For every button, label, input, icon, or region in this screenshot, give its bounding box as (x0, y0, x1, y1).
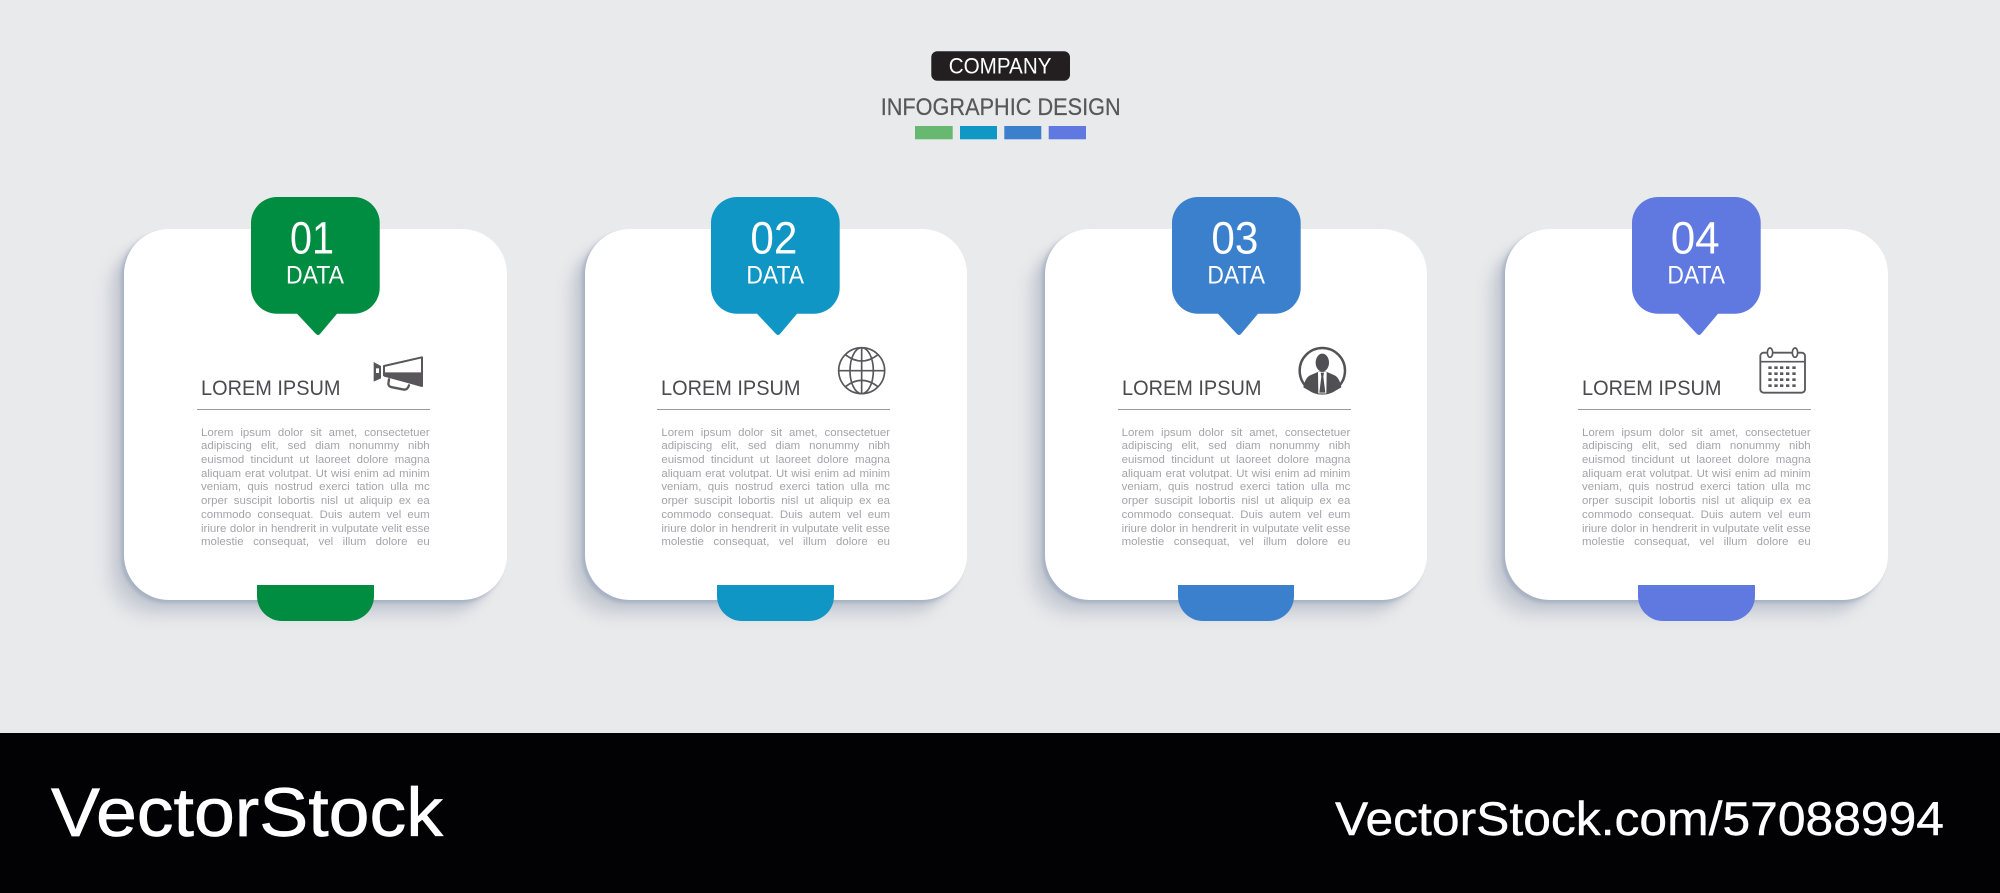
bottom tab (1638, 585, 1755, 621)
footer brand and image id (50, 774, 1944, 851)
body text: molestie consequat, vel illum dolore eu (1122, 536, 1350, 548)
body text: aliquam erat volutpat. Ut wisi enim ad minim (661, 468, 890, 480)
body text: euismod tincidunt ut laoreet dolore magna (201, 454, 430, 466)
company badge (931, 51, 1070, 81)
divider (657, 409, 890, 410)
heading: LOREM IPSUM (1122, 377, 1261, 400)
body text: orper suscipit lobortis nisl ut aliquip ex ea (1582, 495, 1811, 507)
header: company label and title (881, 51, 1121, 140)
legend colour swatches (915, 126, 1086, 139)
body text: iriure dolor in hendrerit in vulputate velit esse (201, 523, 430, 535)
body text: veniam, quis nostrud exerci tation ulla mc (1122, 481, 1350, 493)
divider (1118, 409, 1351, 410)
footer brand and image id: VectorStock.com/57088994 (1335, 792, 1944, 845)
heading: LOREM IPSUM (1582, 377, 1722, 400)
panel: card 04 (1485, 197, 1888, 621)
title: infographic design: INFOGRAPHIC DESIGN (881, 94, 1121, 121)
heading: LOREM IPSUM (201, 377, 340, 400)
number marker 02: 02 (751, 213, 798, 264)
body text: Lorem ipsum dolor sit amet, consectetuer (1122, 426, 1350, 438)
body text: aliquam erat volutpat. Ut wisi enim ad minim (1122, 468, 1350, 480)
icon: calendar (1759, 347, 1806, 394)
body text: commodo consequat. Duis autem vel eum (1122, 509, 1350, 521)
body text: molestie consequat, vel illum dolore eu (1582, 536, 1811, 548)
body text: veniam, quis nostrud exerci tation ulla mc (201, 481, 430, 493)
number marker 04: 04 (1671, 213, 1720, 264)
bottom tab (1178, 585, 1294, 621)
body text: iriure dolor in hendrerit in vulputate velit esse (1122, 523, 1350, 535)
number marker 03 (1172, 197, 1301, 335)
card background (1045, 229, 1427, 600)
number marker 01: DATA (286, 262, 344, 290)
icon: globe (838, 346, 886, 394)
icon: businessman (1298, 346, 1346, 395)
number marker 02 (711, 197, 840, 335)
body text: adipiscing elit, sed diam nonummy nibh (1582, 440, 1811, 452)
card background (124, 229, 507, 600)
body text: veniam, quis nostrud exerci tation ulla mc (661, 481, 890, 493)
body text (661, 426, 890, 548)
number marker 02: DATA (747, 262, 805, 290)
body text: molestie consequat, vel illum dolore eu (661, 536, 890, 548)
body text: aliquam erat volutpat. Ut wisi enim ad minim (201, 468, 430, 480)
body text: euismod tincidunt ut laoreet dolore magna (661, 454, 890, 466)
divider (197, 409, 430, 410)
card background (1505, 229, 1888, 600)
body text (1122, 426, 1350, 548)
bottom tab (717, 585, 834, 621)
icon: megaphone (374, 356, 423, 391)
body text: orper suscipit lobortis nisl ut aliquip ex ea (201, 495, 430, 507)
divider (1578, 409, 1811, 410)
body text: molestie consequat, vel illum dolore eu (201, 536, 430, 548)
body text: Lorem ipsum dolor sit amet, consectetuer (1582, 426, 1811, 438)
body text (1582, 426, 1811, 548)
number marker 03: DATA (1207, 262, 1265, 290)
body text: Lorem ipsum dolor sit amet, consectetuer (661, 426, 890, 438)
number marker 03: 03 (1211, 213, 1258, 264)
number marker 04: DATA (1667, 262, 1725, 290)
body text: commodo consequat. Duis autem vel eum (1582, 509, 1811, 521)
footer brand and image id: VectorStock (51, 774, 444, 851)
number marker 01: 01 (290, 213, 334, 264)
body text: euismod tincidunt ut laoreet dolore magna (1122, 454, 1350, 466)
heading: LOREM IPSUM (661, 377, 801, 400)
company badge: COMPANY (949, 54, 1052, 78)
body text: iriure dolor in hendrerit in vulputate velit esse (1582, 523, 1811, 535)
body text: aliquam erat volutpat. Ut wisi enim ad minim (1582, 468, 1811, 480)
body text: Lorem ipsum dolor sit amet, consectetuer (201, 426, 430, 438)
panel: card 03 (1025, 197, 1427, 621)
panel: card 02 (565, 197, 967, 621)
body text: orper suscipit lobortis nisl ut aliquip ex ea (661, 495, 890, 507)
body text: commodo consequat. Duis autem vel eum (201, 509, 430, 521)
body text: commodo consequat. Duis autem vel eum (661, 509, 890, 521)
card background (585, 229, 967, 600)
body text: adipiscing elit, sed diam nonummy nibh (201, 440, 430, 452)
body text: euismod tincidunt ut laoreet dolore magna (1582, 454, 1811, 466)
number marker 04 (1632, 197, 1761, 335)
body text: adipiscing elit, sed diam nonummy nibh (661, 440, 890, 452)
number marker 01 (251, 197, 380, 335)
bottom tab (257, 585, 374, 621)
panel: card 01 (104, 197, 507, 621)
body text: iriure dolor in hendrerit in vulputate velit esse (661, 523, 890, 535)
footer band (0, 733, 2000, 893)
body text: orper suscipit lobortis nisl ut aliquip ex ea (1122, 495, 1350, 507)
body text (201, 426, 430, 548)
body text: adipiscing elit, sed diam nonummy nibh (1122, 440, 1350, 452)
body text: veniam, quis nostrud exerci tation ulla mc (1582, 481, 1811, 493)
